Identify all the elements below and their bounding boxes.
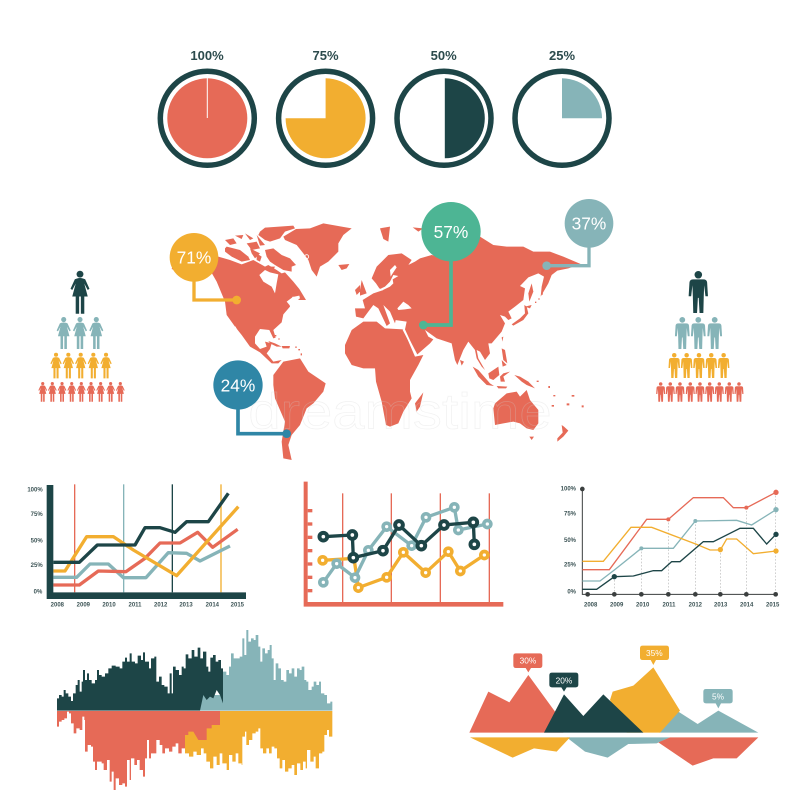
peaks upper <box>469 667 758 733</box>
guide lines <box>75 484 221 592</box>
pyramid: women <box>38 271 125 402</box>
axis labels: 2015 <box>766 602 780 608</box>
axis labels: 2011 <box>129 602 142 608</box>
world map with callouts <box>170 199 613 460</box>
tag 30%: 30% <box>520 656 537 666</box>
axis labels: 75% <box>31 512 43 518</box>
data lines <box>53 493 238 585</box>
man top <box>689 271 708 313</box>
tag 20% <box>549 673 578 692</box>
gauge 50% <box>397 48 491 165</box>
gauge 50%: 50% <box>431 48 457 63</box>
map: east asia and oceania <box>473 283 584 442</box>
axis labels: 2015 <box>231 602 245 608</box>
tag 20%: 20% <box>556 675 573 685</box>
callout: 57% <box>419 202 481 329</box>
series orange <box>319 548 488 591</box>
axis labels: 25% <box>31 563 43 569</box>
women row orange <box>50 353 112 378</box>
chart: dot line chart middle <box>304 482 503 607</box>
gauge 75% <box>279 48 373 165</box>
tag 35% <box>640 646 669 665</box>
chart: thin line chart right <box>561 486 780 608</box>
peaks lower <box>470 737 758 766</box>
tag 5%: 5% <box>712 691 725 701</box>
pyramid: men <box>656 271 743 402</box>
wave orange <box>185 711 332 775</box>
axes <box>47 485 246 599</box>
men row orange <box>668 353 729 378</box>
axis labels: 50% <box>564 538 577 544</box>
map: south america <box>273 358 326 460</box>
axis labels: 2010 <box>102 602 116 608</box>
axis labels: 2008 <box>584 602 598 608</box>
callout: 71% <box>170 233 241 304</box>
tag 5% <box>703 689 733 708</box>
axis labels: 2009 <box>610 602 624 608</box>
gauge 100% <box>160 48 254 165</box>
axis labels: 2008 <box>51 602 65 608</box>
data lines <box>582 492 776 589</box>
gauge 100%: 100% <box>190 48 224 63</box>
axis labels: 2014 <box>740 602 754 608</box>
series dark <box>319 518 478 561</box>
panel: percentage gauges <box>160 48 609 165</box>
map: north america <box>172 223 352 363</box>
wave dark <box>57 648 223 711</box>
chart: line chart left <box>27 484 246 608</box>
woman top <box>71 271 89 314</box>
axis labels: 25% <box>564 563 577 569</box>
callout: 24%: 24% <box>221 376 255 396</box>
gauge 25%: 25% <box>549 48 575 63</box>
map: africa <box>345 322 423 427</box>
axis labels <box>561 486 780 608</box>
axis labels: 2013 <box>714 602 728 608</box>
callout: 71%: 71% <box>177 248 211 268</box>
watermark: dreamstime <box>248 383 552 439</box>
wave red <box>57 711 220 790</box>
axis labels: 50% <box>31 539 43 545</box>
axis labels: 75% <box>564 511 577 517</box>
wave teal <box>200 630 332 711</box>
axis labels: 100% <box>27 488 43 494</box>
gauge 25% <box>515 48 609 165</box>
chart: mirrored waveform <box>57 630 332 790</box>
axis labels: 2009 <box>77 602 91 608</box>
axis labels: 2011 <box>663 602 676 608</box>
series teal <box>320 504 491 586</box>
axis labels: 2012 <box>689 602 703 608</box>
callout: 24% <box>213 360 291 438</box>
men row teal <box>675 317 722 349</box>
tag 35%: 35% <box>646 648 663 658</box>
axis labels <box>27 488 245 608</box>
axes and guides <box>304 482 503 607</box>
chart: mountain chart <box>469 646 758 766</box>
axes <box>580 487 778 597</box>
axis labels: 2013 <box>179 602 193 608</box>
callout: 57%: 57% <box>434 222 468 242</box>
axis labels: 100% <box>561 486 577 492</box>
women row teal <box>57 317 103 349</box>
axis labels: 2010 <box>636 602 650 608</box>
axis labels: 0% <box>34 590 43 596</box>
map: seas, lakes and channels <box>235 255 417 355</box>
map: continents <box>172 223 584 460</box>
dotted guides <box>614 492 776 594</box>
callout: 37%: 37% <box>572 214 606 234</box>
women row red <box>38 382 125 402</box>
map: europe and asia <box>355 237 581 370</box>
callout: 37% <box>542 199 613 270</box>
men row red <box>656 382 743 402</box>
axis labels: 2012 <box>154 602 168 608</box>
axis labels: 2014 <box>206 602 220 608</box>
markers <box>612 490 779 579</box>
tag 30% <box>513 653 542 672</box>
gauge 75%: 75% <box>312 48 339 63</box>
axis labels: 0% <box>567 590 577 596</box>
